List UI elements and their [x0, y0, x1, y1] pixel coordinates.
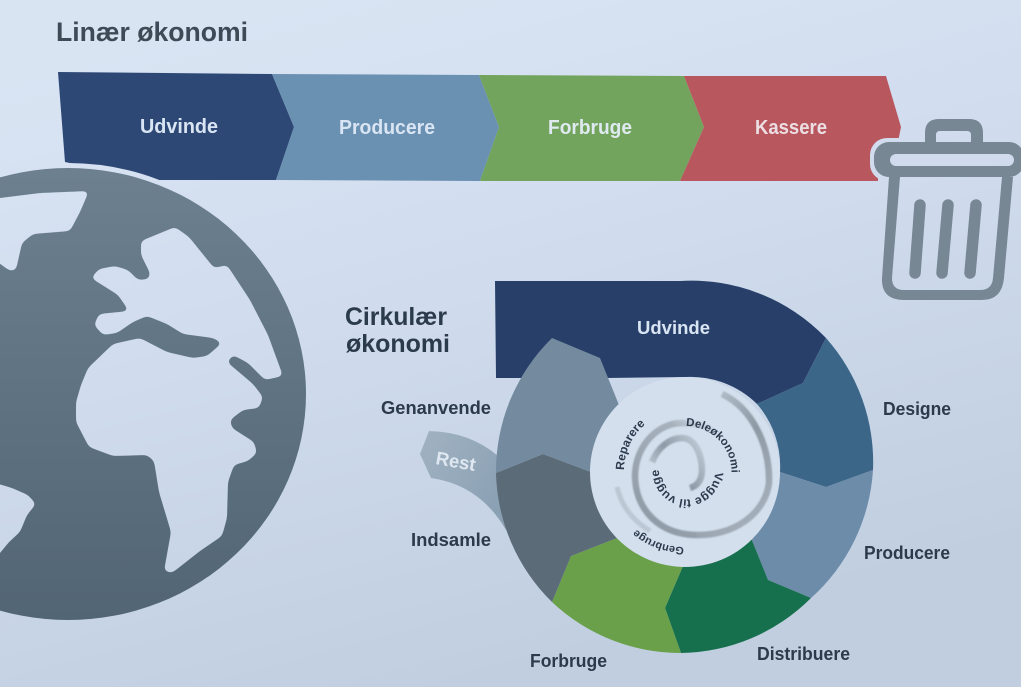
- arrow: Producere: [272, 74, 499, 181]
- segment: Udvinde: Udvinde: [637, 317, 710, 338]
- central disc: [590, 377, 780, 567]
- icon: trash can: [870, 119, 1021, 300]
- linear economy arrow chain: [58, 72, 901, 181]
- segment: Indsamle: [496, 454, 617, 602]
- spiral rings: [617, 394, 769, 535]
- segment: Designe: [757, 338, 873, 487]
- arrow: Udvinde: [58, 72, 294, 180]
- arrow: Udvinde: Udvinde: [140, 116, 218, 138]
- title: linear economy: Linær økonomi: [56, 17, 248, 47]
- label: Indsamle: Indsamle: [411, 529, 491, 550]
- arrow: Forbruge: [479, 75, 704, 181]
- circular economy spiral: [495, 280, 874, 653]
- icon: globe: [0, 168, 306, 620]
- segment: Forbruge: [552, 538, 683, 653]
- segment: Genanvende: [496, 338, 619, 473]
- ring label: Reparere: Reparere: [616, 420, 644, 470]
- arrow: Forbruge: Forbruge: [548, 117, 632, 139]
- label: Genanvende: Genanvende: [381, 397, 491, 418]
- heading: circular economy: Cirkulær: [345, 304, 447, 331]
- arrow: Kassere: Kassere: [755, 117, 827, 139]
- segment: Producere: [751, 470, 873, 598]
- arrow: Kassere: [680, 76, 901, 181]
- label: Producere: Producere: [864, 542, 950, 563]
- ring label: Vugge til vugge: Vugge til vugge: [652, 470, 724, 508]
- segment: Distribuere: [665, 538, 811, 653]
- ring label: Genbruge: Genbruge: [634, 530, 684, 554]
- arrow: Producere: Producere: [339, 117, 435, 139]
- globe land masses: [0, 191, 283, 573]
- label: Distribuere: Distribuere: [757, 643, 850, 664]
- heading: circular economy: økonomi: [346, 331, 450, 358]
- ring label: Deleøkonomi: Deleøkonomi: [686, 418, 740, 472]
- label: Forbruge: Forbruge: [530, 650, 607, 671]
- segment: Udvinde: [495, 281, 826, 404]
- arrow: Rest outflow: [420, 431, 506, 530]
- label: Designe: Designe: [883, 398, 951, 419]
- arrow: Rest outflow: Rest: [434, 447, 477, 475]
- heading: circular economy: [345, 304, 450, 358]
